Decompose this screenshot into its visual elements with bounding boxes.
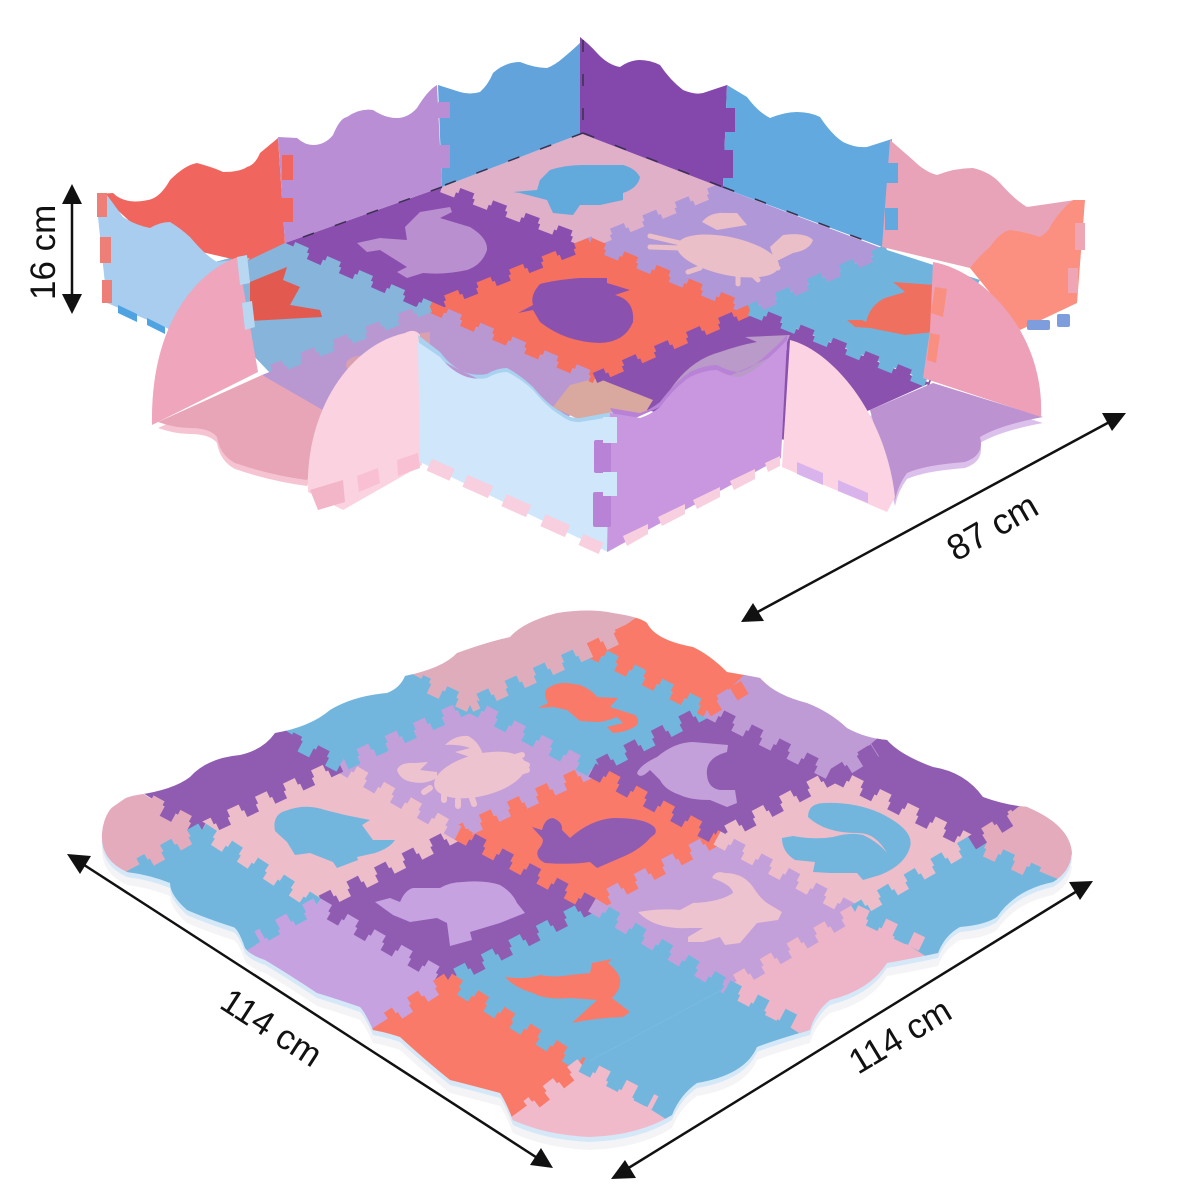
back wall: blue left [438, 40, 583, 187]
floor jigsaw teeth [272, 187, 930, 383]
corner arc: pink right [923, 262, 1041, 417]
back wall: pink [882, 140, 1075, 268]
animal: penguin [274, 807, 395, 868]
wall seam tabs [282, 40, 898, 247]
floor piece: pink lower left [158, 375, 340, 486]
floor piece: lilac lower right [870, 383, 1043, 506]
animal: bird [505, 959, 630, 1023]
back wall: lilac [278, 85, 442, 243]
floor animal: partial shape [342, 332, 430, 385]
dimension: 114 cm right: 114 cm [842, 991, 958, 1082]
dimension: 16 cm: 16 cm [24, 205, 63, 300]
dimension: 87 cm: 87 cm [940, 484, 1045, 569]
dimension: 114 cm right [611, 881, 1093, 1179]
floor animal: seahorse [847, 282, 935, 335]
jigsaw teeth [140, 631, 1038, 1107]
bottom mat: flat play mat [80, 590, 1100, 1160]
back wall: coral [100, 138, 285, 262]
floor tiles [200, 133, 980, 440]
animal: dolphin [637, 742, 737, 807]
inner animal tiles [470, 650, 707, 770]
front arc: left [308, 331, 422, 510]
animal: hippo [375, 881, 525, 946]
floor animal: whale [513, 165, 640, 215]
floor animal: rabbit [518, 278, 633, 343]
floor animal: crab [650, 213, 813, 285]
animal: crab [397, 736, 531, 807]
dimension: 87 cm [741, 413, 1126, 622]
floor animal: cat [250, 267, 322, 321]
mat thickness edge [102, 838, 1072, 1142]
floor animal: dolphin [670, 335, 790, 400]
front wall: lilac [593, 335, 787, 552]
top: mat assembled as playpen [97, 37, 1085, 554]
dimension: 16 cm [24, 184, 82, 314]
front wall: light blue [418, 335, 618, 554]
animal: lizard [638, 872, 782, 945]
end wall: light blue left [97, 193, 250, 340]
corner arc: pink left [152, 255, 258, 425]
animal: seahorse [538, 683, 638, 733]
animal: squirrel [782, 803, 911, 880]
border tiles [102, 610, 1072, 1137]
back wall: purple [580, 37, 727, 188]
dimension: 114 cm left [67, 854, 553, 1168]
floor animal: hippo [357, 207, 487, 278]
mat shadow [102, 846, 1072, 1150]
front arc: right [782, 340, 895, 512]
animal: rabbit [532, 818, 656, 868]
end wall: coral right [970, 200, 1085, 330]
dimension: 114 cm left: 114 cm [214, 981, 329, 1075]
back wall: blue right [723, 85, 892, 248]
